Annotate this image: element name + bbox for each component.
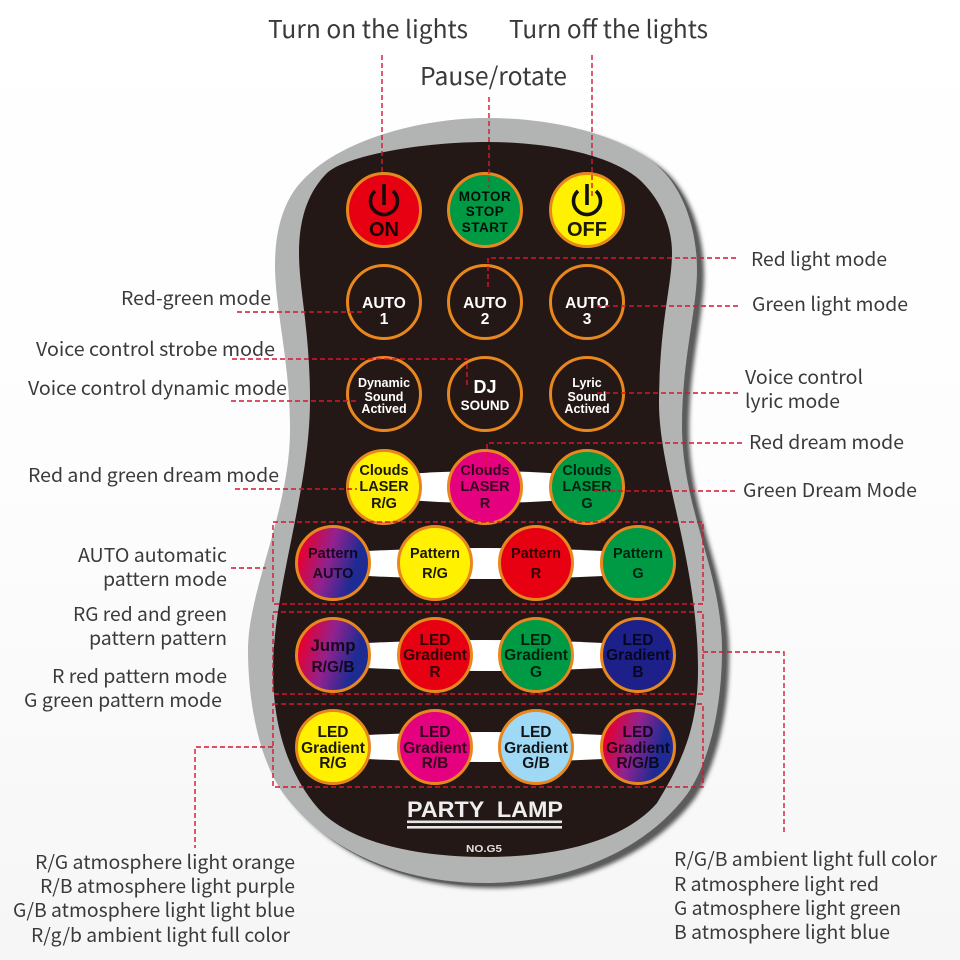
button: LED Gradient R/G/B: LED <box>622 724 654 741</box>
text block: atmosphere lights, left: R/G atmosphere light orange <box>35 848 295 875</box>
button row: jump and gradient <box>296 618 674 692</box>
button: Clouds LASER G: Clouds <box>562 463 612 479</box>
text block: atmosphere lights, right: R/G/B ambient light full color <box>674 845 938 872</box>
button row: pattern <box>296 526 674 600</box>
button: Clouds LASER R <box>448 450 522 524</box>
button: MOTOR STOP START <box>448 174 522 246</box>
label: Red light mode: Red light mode <box>751 245 887 272</box>
button: Dynamic Sound Actived <box>348 358 420 430</box>
label: Red and green dream mode: Red and green dream mode <box>28 461 279 488</box>
button: Clouds LASER G: G <box>581 496 593 512</box>
text block: atmosphere lights, left: G/B atmosphere light light blue <box>13 896 295 923</box>
button: Pattern AUTO: Pattern <box>308 546 358 562</box>
button: DJ SOUND: SOUND <box>461 398 510 413</box>
button: LED Gradient B: Gradient <box>606 647 670 664</box>
label: Red dream mode: Red dream mode <box>749 428 904 455</box>
button: Pattern R: R <box>531 566 542 582</box>
text block: atmosphere lights, right: B atmosphere light blue <box>674 918 890 945</box>
button: OFF <box>550 174 624 246</box>
button: Pattern R: Pattern <box>511 546 561 562</box>
label: R red and G green pattern mode <box>24 662 227 713</box>
button: OFF: OFF <box>567 219 607 241</box>
button: LED Gradient B: B <box>632 664 644 681</box>
dark face <box>273 142 698 857</box>
label: Turn off the lights: Turn off the lights <box>509 11 708 46</box>
button: LED Gradient R/G/B: Gradient <box>606 740 670 757</box>
label: AUTO automatic pattern mode <box>78 541 227 592</box>
button: Lyric Sound Actived <box>550 358 624 430</box>
button: AUTO 1: 1 <box>380 311 389 328</box>
button row: two-colour gradient <box>296 710 674 784</box>
button: Pattern R/G <box>398 526 472 600</box>
button: AUTO 3: AUTO <box>565 295 609 312</box>
button: LED Gradient G: Gradient <box>504 647 568 664</box>
gray casing <box>248 118 722 883</box>
button row: sound <box>348 358 624 430</box>
dashed leader lines <box>195 55 784 848</box>
label: Voice control strobe mode: Voice control strobe mode <box>36 335 275 362</box>
button: LED Gradient G <box>500 618 572 692</box>
button: AUTO 1 <box>348 266 420 338</box>
button: Lyric Sound Actived: Lyric <box>572 376 602 390</box>
button: LED Gradient G/B <box>500 710 572 784</box>
label: RG red and green pattern: RG red and green <box>73 600 227 627</box>
button: Pattern R/G: R/G <box>422 566 448 582</box>
white connector bars <box>333 471 638 762</box>
button: LED Gradient R/B: R/B <box>422 755 448 772</box>
button: Pattern G: Pattern <box>613 546 663 562</box>
label: Turn on the lights: Turn on the lights <box>268 11 468 46</box>
button: Clouds LASER R/G: R/G <box>371 496 397 512</box>
button: Jump R/G/B: R/G/B <box>311 659 355 676</box>
button: Clouds LASER R/G <box>348 450 420 524</box>
button: Clouds LASER R: LASER <box>460 479 510 495</box>
button: DJ SOUND <box>448 358 522 430</box>
text block: atmosphere lights, left <box>13 848 295 948</box>
remote control body <box>248 118 729 888</box>
button: AUTO 2: 2 <box>481 311 489 328</box>
button: AUTO 3: 3 <box>583 311 592 328</box>
button: Clouds LASER G: LASER <box>562 479 612 495</box>
label: RG red and green pattern: pattern pattern <box>89 624 227 651</box>
button: Pattern AUTO: AUTO <box>313 566 353 582</box>
label: Voice control lyric mode: Voice control <box>745 363 863 390</box>
label: Voice control lyric mode: lyric mode <box>745 387 840 414</box>
label: Voice control dynamic mode: Voice control dynamic mode <box>28 374 287 401</box>
button row: clouds laser <box>348 450 624 524</box>
button: LED Gradient G/B: LED <box>520 724 552 741</box>
button: LED Gradient R/G: Gradient <box>301 740 365 757</box>
button: LED Gradient R/B <box>398 710 472 784</box>
button: Pattern G: G <box>632 566 644 582</box>
button: DJ SOUND: DJ <box>473 377 497 397</box>
button: LED Gradient R: Gradient <box>403 647 467 664</box>
button: Pattern G <box>602 526 674 600</box>
button: LED Gradient B: LED <box>622 632 654 649</box>
button: LED Gradient G: G <box>530 664 542 681</box>
button: AUTO 1: AUTO <box>362 295 406 312</box>
button: Lyric Sound Actived: Sound <box>568 390 606 404</box>
button: LED Gradient R: R <box>429 664 441 681</box>
label: Red-green mode: Red-green mode <box>121 284 271 311</box>
button: Clouds LASER R: Clouds <box>460 463 510 479</box>
label: Green Dream Mode: Green Dream Mode <box>743 476 917 503</box>
hard body shadow <box>252 121 726 886</box>
button: ON: ON <box>369 219 399 241</box>
button: Dynamic Sound Actived: Sound <box>365 390 403 404</box>
text block: atmosphere lights, left: R/B atmosphere light purple <box>40 872 295 899</box>
button: AUTO 3 <box>550 266 624 338</box>
text block: atmosphere lights, right: G atmosphere light green <box>674 894 901 921</box>
button: AUTO 2: AUTO <box>463 295 507 312</box>
button: Dynamic Sound Actived: Dynamic <box>358 376 410 390</box>
button: Clouds LASER R/G: Clouds <box>359 463 409 479</box>
button: AUTO 2 <box>448 266 522 338</box>
button: LED Gradient B <box>602 618 674 692</box>
button: LED Gradient R/G: LED <box>318 724 348 741</box>
button: MOTOR STOP START: START <box>462 220 508 235</box>
brand: PARTY LAMP: PARTY LAMP <box>407 797 563 822</box>
button: MOTOR STOP START: STOP <box>466 204 504 219</box>
text block: atmosphere lights, left: R/g/b ambient light full color <box>31 921 291 948</box>
label: R red and G green pattern mode: R red pattern mode <box>52 662 227 689</box>
button: Pattern R <box>500 526 572 600</box>
text block: atmosphere lights, right: R atmosphere light red <box>674 870 879 897</box>
text block: atmosphere lights, right <box>674 845 938 945</box>
button: Jump R/G/B: Jump <box>310 636 356 655</box>
button: Pattern AUTO <box>296 526 370 600</box>
soft body shadow <box>255 123 729 888</box>
button: LED Gradient G: LED <box>520 632 552 649</box>
button: Dynamic Sound Actived: Actived <box>361 402 407 416</box>
button: Jump R/G/B <box>296 618 370 692</box>
button: LED Gradient R/G <box>296 710 370 784</box>
label: Voice control lyric mode <box>745 363 863 414</box>
button row: power and motor <box>348 174 624 246</box>
label: AUTO automatic pattern mode: pattern mode <box>103 565 227 592</box>
button: Lyric Sound Actived: Actived <box>564 402 610 416</box>
button: LED Gradient G/B: Gradient <box>504 740 568 757</box>
button: Clouds LASER G <box>550 450 624 524</box>
label: RG red and green pattern <box>73 600 227 651</box>
button: Clouds LASER R: R <box>480 496 491 512</box>
button: Pattern R/G: Pattern <box>410 546 460 562</box>
button: LED Gradient R/B: Gradient <box>403 740 467 757</box>
button: LED Gradient R/G/B <box>602 710 674 784</box>
button: LED Gradient R: LED <box>420 632 450 649</box>
button: ON <box>348 174 420 246</box>
label: AUTO automatic pattern mode: AUTO automatic <box>78 541 227 568</box>
button: LED Gradient R/G: R/G <box>319 755 347 772</box>
button: MOTOR STOP START: MOTOR <box>459 189 511 204</box>
label: R red and G green pattern mode: G green pattern mode <box>24 686 222 713</box>
button: LED Gradient R/G/B: R/G/B <box>616 755 660 772</box>
label: Pause/rotate: Pause/rotate <box>420 58 567 93</box>
button: Clouds LASER R/G: LASER <box>359 479 409 495</box>
model number: NO.G5 <box>466 843 502 855</box>
button: LED Gradient R <box>398 618 472 692</box>
button: LED Gradient G/B: G/B <box>522 755 550 772</box>
button: LED Gradient R/B: LED <box>420 724 450 741</box>
button row: AUTO <box>348 266 624 338</box>
label: Green light mode: Green light mode <box>752 290 908 317</box>
